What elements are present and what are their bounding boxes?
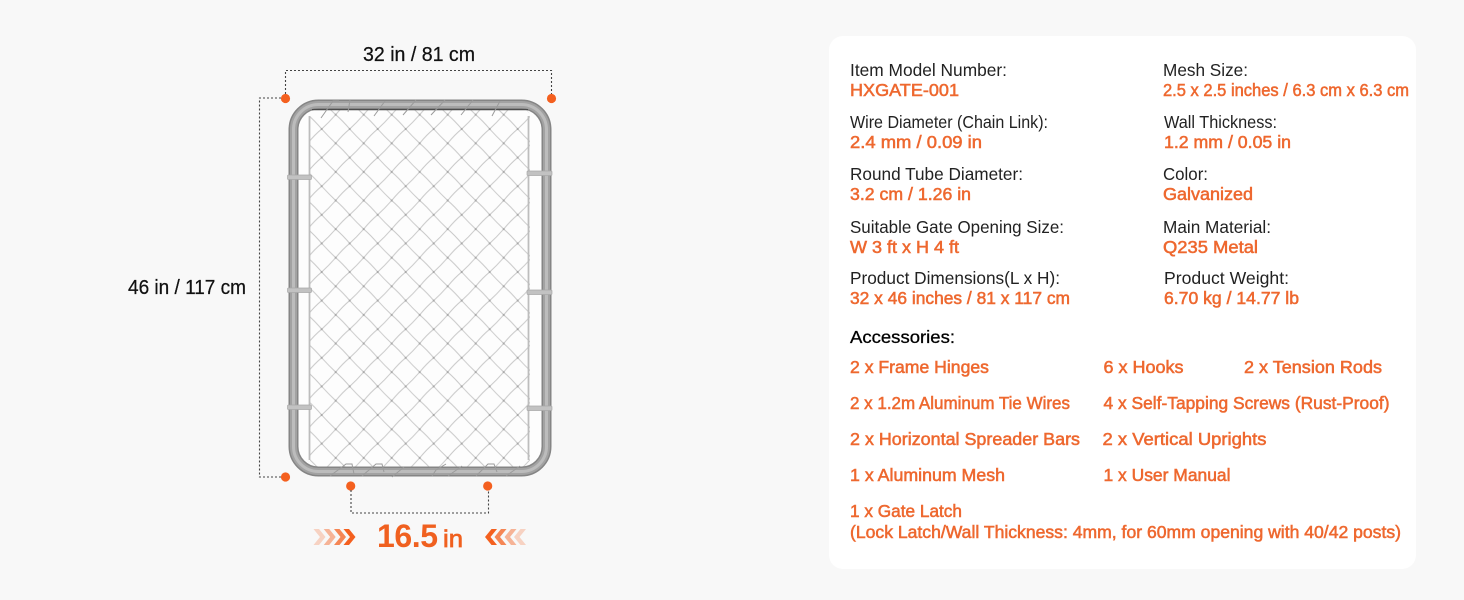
spec: mesh size bbox=[1163, 60, 1409, 100]
spec: main material bbox=[1163, 217, 1271, 257]
spec: round tube diameter: Round Tube Diameter: bbox=[850, 164, 1023, 184]
spec: round tube diameter: 3.2 cm / 1.26 in bbox=[850, 184, 971, 204]
right arrows bbox=[485, 529, 526, 545]
spec: mesh size: 2.5 x 2.5 inches / 6.3 cm x 6.3 cm bbox=[1163, 80, 1409, 100]
width label: 32 in / 81 cm bbox=[363, 44, 475, 66]
spec: gate opening size: W 3 ft x H 4 ft bbox=[850, 237, 959, 257]
accessories list: 2 x 1.2m Aluminum Tie Wires bbox=[850, 393, 1070, 413]
accessories list: (Lock Latch/Wall Thickness: 4mm, for 60mm opening with 40/42 posts) bbox=[850, 522, 1401, 542]
spec: item model number bbox=[850, 60, 1007, 100]
tubular frame bbox=[294, 104, 546, 472]
spec: product weight bbox=[1164, 268, 1299, 308]
opening unit: in bbox=[443, 526, 463, 553]
accessories list: 4 x Self-Tapping Screws (Rust-Proof) bbox=[1104, 393, 1390, 413]
spec: wire diameter: 2.4 mm / 0.09 in bbox=[850, 132, 982, 152]
spec: item model number: HXGATE-001 bbox=[850, 80, 959, 100]
opening value: 16.5 bbox=[377, 518, 438, 554]
spec: wire diameter: Wire Diameter (Chain Link): bbox=[850, 112, 1048, 132]
spec: product dimensions: 32 x 46 inches / 81 x 117 cm bbox=[850, 288, 1070, 308]
dimension line top bbox=[286, 70, 552, 98]
opening dimension: 16.5 in bbox=[314, 490, 526, 554]
spec: gate opening size: Suitable Gate Opening Size: bbox=[850, 217, 1064, 237]
spec: color: Color: bbox=[1163, 164, 1208, 184]
height dimension: 46 in / 117 cm bbox=[128, 98, 285, 477]
spec: wall thickness: 1.2 mm / 0.05 in bbox=[1164, 132, 1291, 152]
accessories heading: Accessories: bbox=[850, 327, 955, 347]
spec: wall thickness: Wall Thickness: bbox=[1164, 112, 1277, 132]
mesh infill bbox=[310, 110, 530, 466]
orange marker dots bbox=[281, 94, 556, 491]
spec: mesh size: Mesh Size: bbox=[1163, 60, 1248, 80]
accessories list: 1 x User Manual bbox=[1104, 465, 1230, 485]
accessories list: 6 x Hooks bbox=[1104, 357, 1184, 377]
spec: main material: Main Material: bbox=[1163, 217, 1271, 237]
dimension line bottom bbox=[351, 490, 488, 513]
spec: wire diameter bbox=[850, 112, 1048, 152]
accessories list: 2 x Frame Hinges bbox=[850, 357, 989, 377]
accessories list: 2 x Horizontal Spreader Bars bbox=[850, 429, 1080, 449]
width dimension: 32 in / 81 cm bbox=[286, 44, 552, 98]
height label: 46 in / 117 cm bbox=[128, 277, 246, 299]
accessories list: 1 x Gate Latch bbox=[850, 501, 962, 521]
inner vertical tension rods bbox=[310, 116, 528, 460]
spec: gate opening size bbox=[850, 217, 1064, 257]
dimension line left bbox=[260, 98, 285, 477]
accessories list: 2 x Tension Rods bbox=[1244, 357, 1382, 377]
gate illustration bbox=[288, 100, 552, 477]
spec: item model number: Item Model Number: bbox=[850, 60, 1007, 80]
accessories list: 1 x Aluminum Mesh bbox=[850, 465, 1005, 485]
spec: product weight: 6.70 kg / 14.77 lb bbox=[1164, 288, 1299, 308]
left arrows bbox=[314, 529, 356, 545]
wire twists over frame bbox=[321, 100, 520, 477]
spec: main material: Q235 Metal bbox=[1163, 237, 1258, 257]
hinge brackets bbox=[288, 171, 552, 410]
spec: product weight: Product Weight: bbox=[1164, 268, 1289, 288]
spec: color: Galvanized bbox=[1163, 184, 1253, 204]
spec: color bbox=[1163, 164, 1253, 204]
spec: wall thickness bbox=[1164, 112, 1291, 152]
accessories list bbox=[850, 357, 1401, 542]
accessories list: 2 x Vertical Uprights bbox=[1102, 429, 1267, 449]
spec: product dimensions: Product Dimensions(L x H): bbox=[850, 268, 1060, 288]
panel: specifications bbox=[829, 36, 1416, 569]
spec: round tube diameter bbox=[850, 164, 1023, 204]
spec: product dimensions bbox=[850, 268, 1070, 308]
